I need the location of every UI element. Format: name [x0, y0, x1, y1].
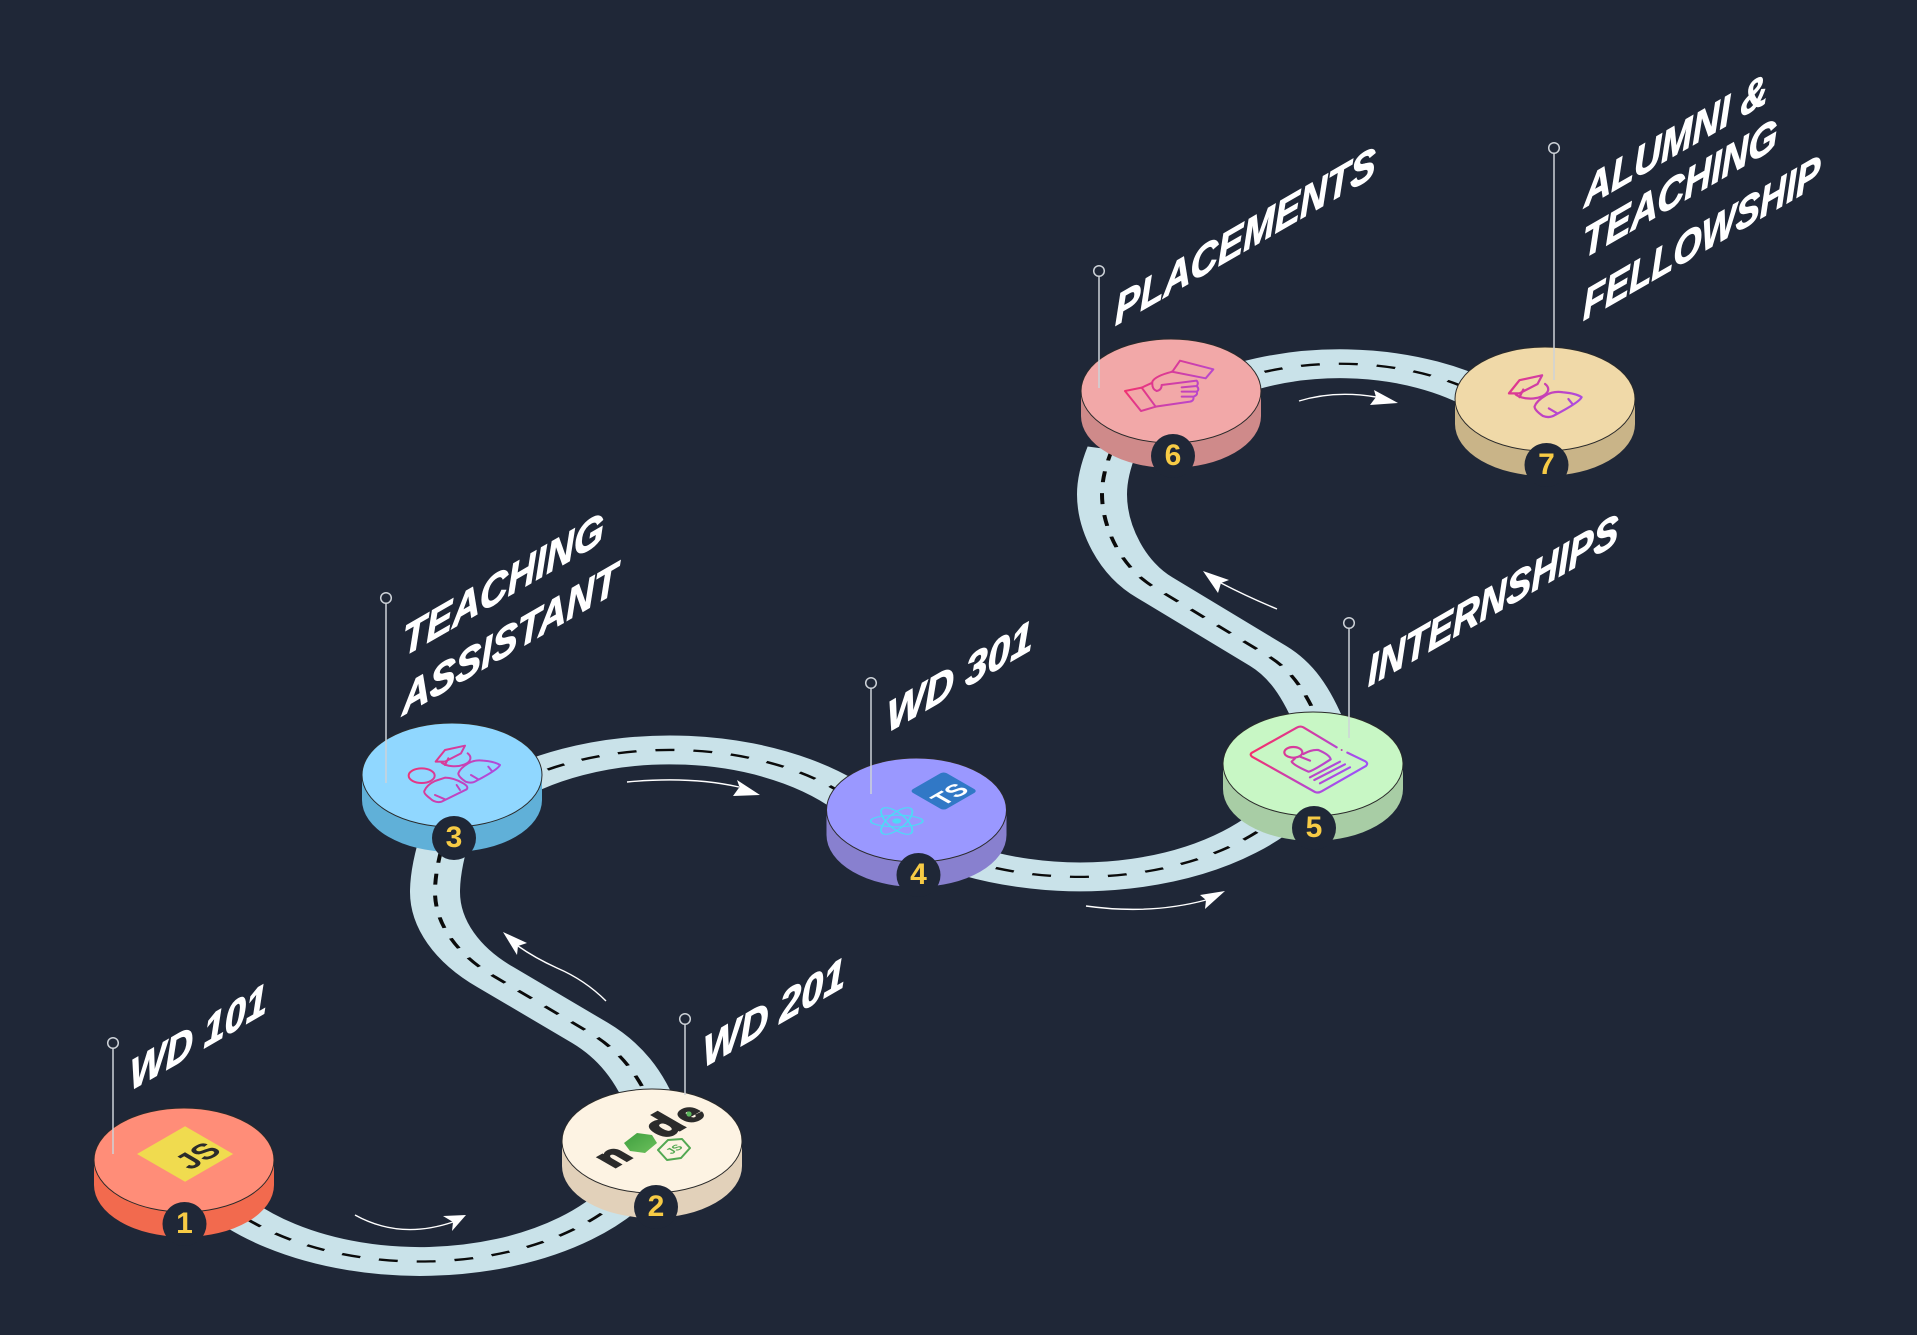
- arrow: stage 3 to 4: [627, 780, 760, 796]
- arrow: stage 2 to 3: [503, 932, 606, 1001]
- icon: Node.js logo: [580, 1096, 714, 1173]
- badge 5: 5: [1306, 811, 1322, 844]
- icon: Node.js logo: n: [584, 1140, 640, 1172]
- stage 1 disc: WD 101: [94, 1108, 274, 1246]
- badge 3: [432, 816, 476, 860]
- badge 5: [1292, 806, 1336, 850]
- road: stage 5 to 6: [1102, 450, 1322, 730]
- icon: Node.js logo: d: [632, 1107, 695, 1143]
- stage 6 disc: Placements: [1081, 339, 1261, 478]
- icon: graduate: [1509, 375, 1582, 417]
- pin 6: [1094, 266, 1104, 388]
- badge 7: [1524, 443, 1568, 487]
- icon: Node.js logo: e: [664, 1100, 713, 1128]
- road: stage 3 to 4: [490, 750, 870, 814]
- road: stage 1 to 2: [190, 1151, 655, 1262]
- label: Alumni and Teaching Fellowship: FELLOWSHIP: [1583, 146, 1821, 331]
- stage 4 disc: WD 301: [826, 758, 1006, 897]
- icon: JavaScript logo: [137, 1126, 233, 1182]
- label: WD 301: WD 301: [887, 611, 1032, 743]
- label: WD 201: WD 201: [703, 948, 845, 1078]
- road: stage 6 to 7: [1200, 364, 1490, 400]
- icon: teacher and student: [409, 746, 500, 802]
- pin 7: [1549, 143, 1559, 380]
- stage 7 disc: Alumni and Teaching Fellowship: [1455, 347, 1635, 487]
- badge 1: [162, 1202, 206, 1246]
- icon: JavaScript logo: JS: [166, 1138, 229, 1174]
- stage 3 disc: Teaching Assistant: [362, 723, 542, 860]
- badge 1: 1: [176, 1207, 193, 1240]
- pin 3: [381, 593, 391, 783]
- label: Teaching Assistant: TEACHING: [403, 503, 604, 667]
- badge 4: 4: [910, 858, 927, 891]
- badge 2: 2: [648, 1190, 664, 1223]
- icon: React logo: [871, 805, 923, 837]
- label: Alumni and Teaching Fellowship: ALUMNI &: [1583, 64, 1768, 219]
- label: Alumni and Teaching Fellowship: TEACHING: [1583, 109, 1777, 269]
- road: stage 4 to 5: [930, 794, 1300, 877]
- badge 6: [1151, 434, 1195, 478]
- pin 1: [108, 1038, 118, 1154]
- arrow: stage 1 to 2: [355, 1215, 466, 1231]
- label: Placements: PLACEMENTS: [1115, 137, 1376, 336]
- stage 5 disc: Internships: [1223, 712, 1403, 850]
- icon: resume card: [1251, 727, 1367, 793]
- badge 6: 6: [1165, 439, 1181, 472]
- icon: Node.js logo: JS: [664, 1143, 687, 1156]
- arrow: stage 5 to 6: [1203, 571, 1277, 609]
- badge 4: [896, 853, 940, 897]
- badge 3: 3: [446, 821, 462, 854]
- road: stage 2 to 3: [435, 830, 655, 1115]
- pin 5: [1344, 618, 1354, 738]
- label: Teaching Assistant: ASSISTANT: [401, 552, 621, 727]
- badge 7: 7: [1538, 448, 1555, 481]
- label: WD 101: WD 101: [130, 974, 267, 1101]
- icon: handshake with card: [1125, 361, 1213, 411]
- pin 4: [866, 678, 876, 794]
- arrow: stage 6 to 7: [1299, 390, 1398, 405]
- arrow: stage 4 to 5: [1086, 891, 1225, 909]
- stage 2 disc: WD 201: [562, 1089, 742, 1229]
- label: Alumni and Teaching Fellowship: [1583, 64, 1821, 331]
- icon: TypeScript logo: TS: [925, 780, 976, 809]
- icon: TypeScript logo: [912, 773, 978, 811]
- pin 2: [680, 1014, 690, 1095]
- label: Internships: INTERNSHIPS: [1368, 504, 1619, 697]
- badge 2: [634, 1185, 678, 1229]
